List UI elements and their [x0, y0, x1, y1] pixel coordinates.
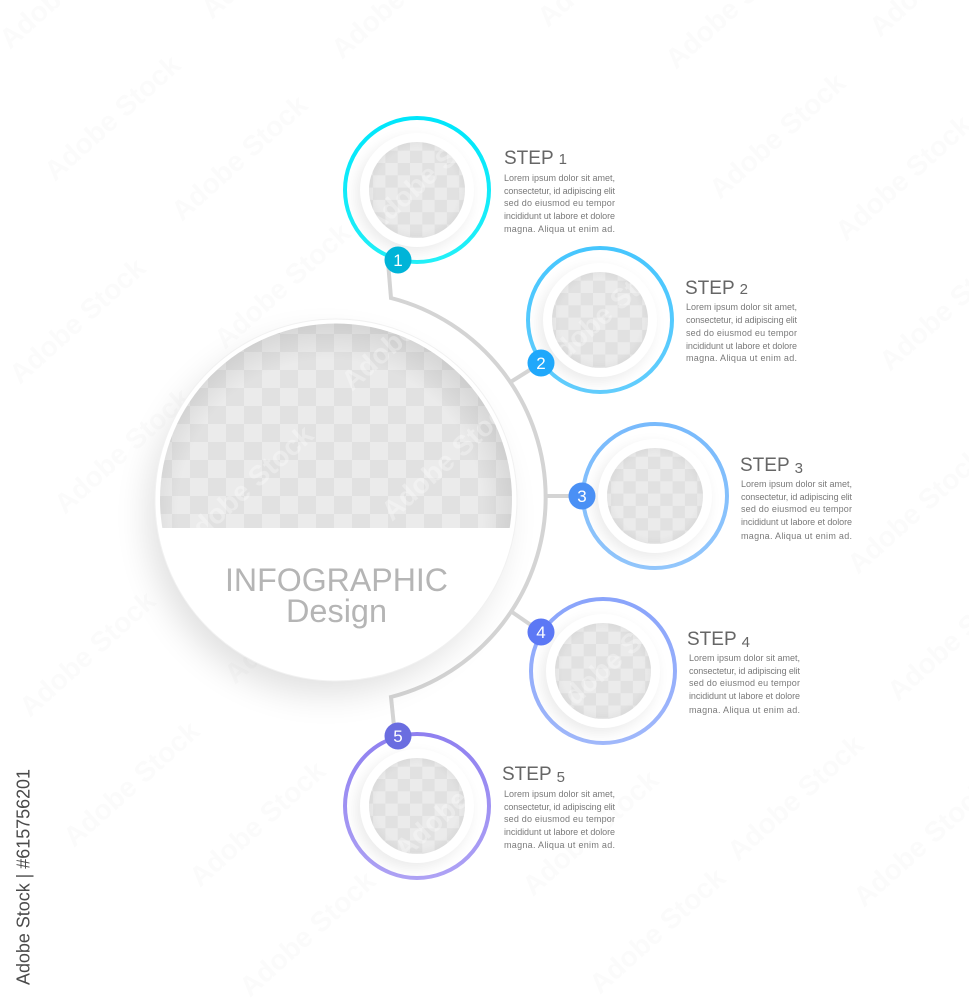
step 4 text	[687, 629, 800, 715]
step 5 circle	[345, 734, 489, 878]
watermark over photos: Adobe Stock	[335, 259, 484, 396]
step 5 text: consectetur, id adipiscing elit	[504, 802, 615, 812]
step 2 badge: 2	[536, 354, 546, 373]
step 3 badge	[568, 482, 596, 510]
step 1 text: STEP 1	[504, 148, 567, 169]
watermark pattern: Adobe Stock	[721, 729, 870, 866]
step 1 text: consectetur, id adipiscing elit	[504, 186, 615, 196]
watermark pattern: Adobe Stock	[583, 862, 732, 999]
step 2 text: STEP 2	[685, 278, 748, 299]
step 4 text: incididunt ut labore et dolore	[689, 691, 800, 701]
step 1 text: sed do eiusmod eu tempor	[504, 198, 615, 208]
step 5 badge: 5	[393, 727, 403, 746]
step 3 badge: 3	[577, 487, 587, 506]
watermark over photos: Adobe Stock	[533, 242, 682, 379]
step 4 text: 4	[742, 634, 750, 651]
main subtitle: Design	[286, 593, 387, 629]
watermark pattern: Adobe Stock	[57, 715, 206, 852]
main title: INFOGRAPHIC	[225, 562, 448, 598]
step 4 text: STEP	[687, 629, 736, 650]
watermark over photos: Adobe Stock	[171, 419, 320, 556]
step 4 text: sed do eiusmod eu tempor	[689, 678, 800, 688]
watermark over photos	[200, 150, 641, 850]
step 2 text	[685, 278, 797, 363]
step 5 text: Lorem ipsum dolor sit amet,	[504, 789, 615, 799]
step 3 text: sed do eiusmod eu tempor	[741, 504, 852, 514]
step 2 badge	[528, 350, 554, 376]
step 1 circle	[345, 118, 489, 262]
step 3 text: Lorem ipsum dolor sit amet,	[741, 479, 852, 489]
main circle	[148, 319, 517, 694]
step 4 badge: 4	[536, 623, 546, 642]
watermark pattern: Adobe Stock	[516, 764, 665, 901]
watermark pattern: Adobe Stock	[13, 585, 162, 722]
step 5 text: sed do eiusmod eu tempor	[504, 814, 615, 824]
stock credit: Adobe Stock | #615756201	[14, 769, 34, 985]
step 5 text	[502, 764, 615, 850]
step 5 text: 5	[557, 769, 565, 786]
step 5 text: incididunt ut labore et dolore	[504, 827, 615, 837]
main photo placeholder	[155, 320, 517, 528]
step 4 text: Lorem ipsum dolor sit amet,	[689, 653, 800, 663]
step 3 text: consectetur, id adipiscing elit	[741, 492, 852, 502]
step 2 text: Lorem ipsum dolor sit amet,	[686, 302, 797, 312]
watermark pattern: Adobe Stock	[3, 252, 152, 389]
step 3 text: 3	[795, 460, 803, 477]
watermark over photos: Adobe Stock	[543, 587, 692, 724]
step 1 text: magna. Aliqua ut enim ad.	[504, 224, 615, 234]
watermark over photos: Adobe Stock	[375, 389, 524, 526]
watermark over photos: Adobe Stock	[388, 727, 537, 864]
step 4 badge	[528, 618, 554, 646]
step 1 badge: 1	[393, 251, 403, 270]
watermark over photos: Adobe Stock	[358, 102, 507, 239]
watermark pattern: Adobe Stock	[208, 217, 357, 354]
connector to step 3	[544, 494, 582, 498]
step 3 text: incididunt ut labore et dolore	[741, 517, 852, 527]
step 4 text: magna. Aliqua ut enim ad.	[689, 705, 800, 715]
step 3 text: STEP	[740, 455, 789, 476]
step 3 text	[740, 455, 852, 541]
step 3 text: magna. Aliqua ut enim ad.	[741, 531, 852, 541]
watermark pattern: Adobe Stock	[703, 67, 852, 204]
step 5 text: STEP	[502, 764, 551, 785]
step 5 badge	[384, 722, 412, 750]
step 1 badge	[384, 246, 412, 274]
step 5 text: magna. Aliqua ut enim ad.	[504, 840, 615, 850]
step 1 text: incididunt ut labore et dolore	[504, 211, 615, 221]
step 1 text: Lorem ipsum dolor sit amet,	[504, 173, 615, 183]
step 1 text	[504, 148, 615, 234]
watermark pattern: Adobe Stock	[183, 755, 332, 892]
step 4 circle	[531, 599, 675, 743]
step 2 text: sed do eiusmod eu tempor	[686, 328, 797, 338]
step 2 text: incididunt ut labore et dolore	[686, 341, 797, 351]
watermark pattern: Adobe Stock	[38, 49, 187, 186]
step 2 circle	[528, 248, 672, 392]
watermark pattern: Adobe Stock	[165, 89, 314, 226]
step 3 circle	[583, 424, 727, 568]
watermark pattern: Adobe Stock	[233, 865, 382, 1000]
connector to step 2	[509, 363, 541, 383]
watermark pattern: Adobe Stock	[48, 382, 197, 519]
step 4 text: consectetur, id adipiscing elit	[689, 666, 800, 676]
step 2 text: magna. Aliqua ut enim ad.	[686, 353, 797, 363]
connector to step 4	[512, 612, 541, 632]
step 2 text: consectetur, id adipiscing elit	[686, 315, 797, 325]
watermark pattern: Adobe Stock	[218, 552, 367, 689]
connector arc	[388, 262, 582, 736]
